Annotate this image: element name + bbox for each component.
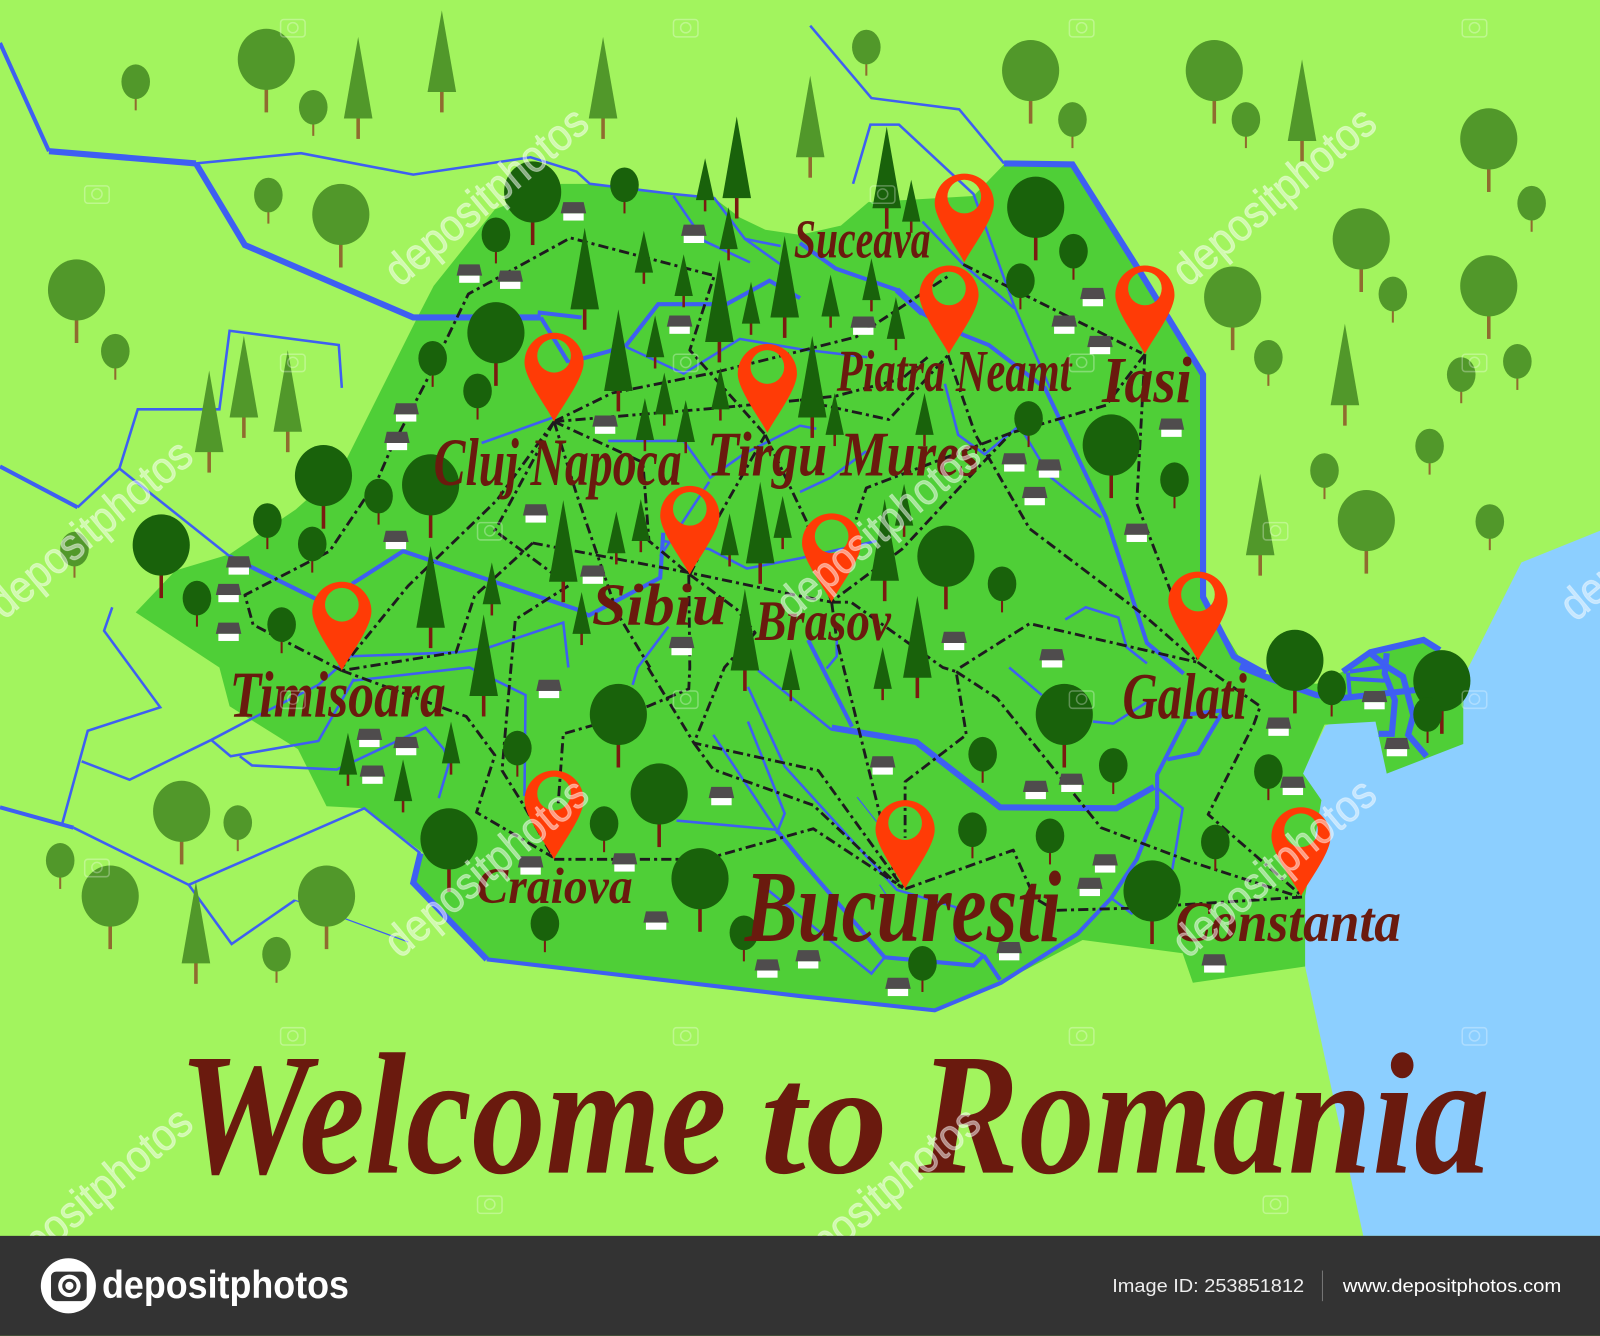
footer bar (0, 1236, 1600, 1336)
city labels: Piatra Neamt (836, 338, 1073, 404)
red city location pins (312, 174, 1331, 896)
watermarks: depositphotos (1161, 96, 1386, 296)
trees inside Romania (133, 116, 1470, 992)
city labels: Timisoara (230, 659, 446, 731)
watermarks: depositphotos (374, 96, 598, 296)
website: www.depositphotos.com (1342, 1275, 1561, 1296)
watermarks: depositphotos (1161, 767, 1386, 967)
brand name: depositphotos (102, 1264, 349, 1307)
village houses (216, 202, 1410, 996)
watermarks: depositphotos (765, 428, 990, 628)
railway and road network (245, 238, 1302, 910)
city labels: Craiova (477, 859, 633, 915)
Romania land shape (136, 164, 1463, 1010)
icon: camera logo (41, 1258, 96, 1313)
trees outside Romania (46, 10, 1546, 984)
watermarks: depositphotos (374, 767, 598, 967)
title: Romania (917, 1018, 1490, 1211)
city labels: Galati (1122, 662, 1247, 734)
city labels: Cluj Napoca (434, 425, 682, 500)
city labels: Constanta (1176, 891, 1401, 954)
city labels: Brasov (754, 590, 891, 653)
city labels: Iasi (1101, 345, 1192, 417)
title (179, 1018, 1490, 1211)
Black Sea (1302, 531, 1600, 1236)
rivers and borders (0, 26, 1440, 1010)
title: to (760, 1033, 888, 1208)
city labels: Bucuresti (744, 851, 1061, 964)
city labels: Tirgu Mures (707, 420, 980, 490)
image ID: Image ID: 253851812 (1112, 1275, 1304, 1296)
watermarks: depositphotos (765, 1096, 990, 1296)
city labels (230, 208, 1401, 964)
city labels: Sibiu (592, 572, 727, 638)
city labels: Suceava (794, 208, 931, 269)
title: Welcome (179, 1018, 727, 1211)
watermark camera marks (85, 20, 1487, 1213)
